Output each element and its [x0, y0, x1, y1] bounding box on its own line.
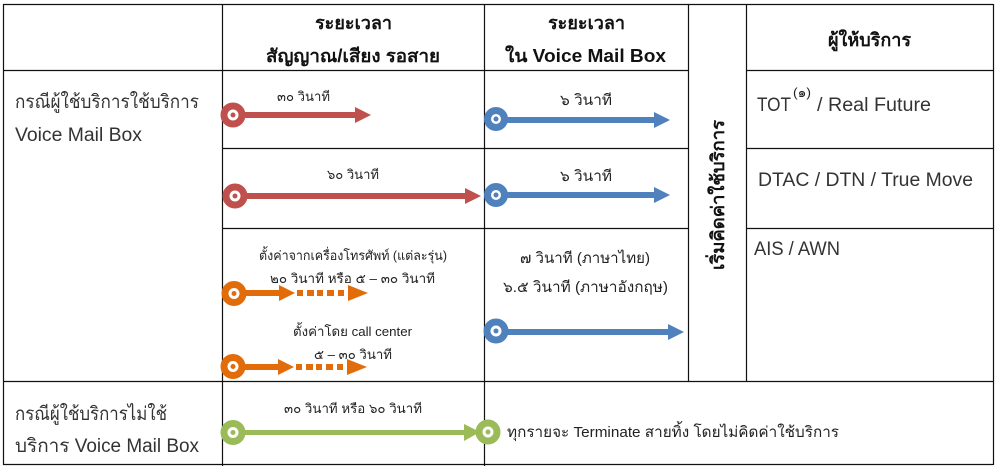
provider: TOT / Real Future: [757, 85, 931, 116]
header: provider: ผู้ให้บริการ: [828, 29, 911, 52]
row label: does not use voice mail box: [15, 403, 199, 457]
provider: TOT / Real Future: (๑): [793, 85, 811, 100]
blue timeline: Thai and English durations: ๗ วินาที (ภาษาไทย): [520, 249, 650, 267]
orange timeline: phone setting: [225, 246, 447, 302]
provider: TOT / Real Future: TOT: [757, 95, 791, 116]
provider: DTAC / DTN / True Move: DTAC / DTN / True Move: [758, 170, 973, 191]
header: ring duration: [266, 13, 440, 67]
row label: does not use voice mail box: กรณีผู้ใช้บริการไม่ใช้: [15, 403, 167, 425]
orange timeline: call center setting: [224, 322, 413, 376]
terminate marker and note: ทุกรายจะ Terminate สายทิ้ง โดยไม่คิดค่าใช้บริการ: [507, 421, 839, 442]
blue timeline: Thai and English durations: [487, 249, 684, 340]
row label: uses voice mail box: Voice Mail Box: [15, 125, 142, 146]
header: ring duration: ระยะเวลา: [315, 13, 392, 33]
blue timeline: 6 seconds, first row: ๖ วินาที: [560, 92, 612, 109]
row label: uses voice mail box: กรณีผู้ใช้บริการใช้บริการ: [15, 91, 199, 113]
red timeline: 30 seconds: ๓๐ วินาที: [277, 89, 330, 104]
orange timeline: phone setting: ตั้งค่าจากเครื่องโทรศัพท์ (แต่ละรุ่น): [259, 246, 447, 264]
header: voice mail duration: [505, 13, 666, 66]
blue timeline: 6 seconds, second row: [488, 168, 670, 204]
blue timeline: Thai and English durations: ๖.๕ วินาที (ภาษาอังกฤษ): [503, 279, 668, 296]
header: ring duration: สัญญาณ/เสียง รอสาย: [266, 46, 440, 67]
red timeline: 60 seconds: [226, 167, 481, 205]
orange timeline: call center setting: ๕ – ๓๐ วินาที: [314, 347, 392, 362]
provider: TOT / Real Future: / Real Future: [817, 95, 931, 116]
row label: does not use voice mail box: บริการ Voice Mail Box: [15, 436, 199, 457]
green timeline: 30 or 60 seconds: ๓๐ วินาที หรือ ๖๐ วินาที: [284, 401, 422, 416]
red timeline: 30 seconds: [224, 89, 371, 124]
green timeline: 30 or 60 seconds: [224, 401, 480, 442]
orange timeline: call center setting: ตั้งค่าโดย call center: [293, 322, 413, 339]
header: voice mail duration: ใน Voice Mail Box: [505, 45, 666, 66]
vertical label: billing starts: เริ่มคิดค่าใช้บริการ: [705, 120, 728, 270]
header: voice mail duration: ระยะเวลา: [548, 13, 625, 33]
header row: [266, 13, 911, 67]
blue timeline: 6 seconds, first row: [488, 92, 670, 128]
blue timeline: 6 seconds, second row: ๖ วินาที: [560, 168, 612, 185]
provider: AIS / AWN: AIS / AWN: [754, 239, 840, 260]
row label: uses voice mail box: [15, 91, 199, 146]
red timeline: 60 seconds: ๖๐ วินาที: [327, 167, 379, 182]
orange timeline: phone setting: ๒๐ วินาที หรือ ๕ – ๓๐ วินาที: [270, 271, 435, 286]
